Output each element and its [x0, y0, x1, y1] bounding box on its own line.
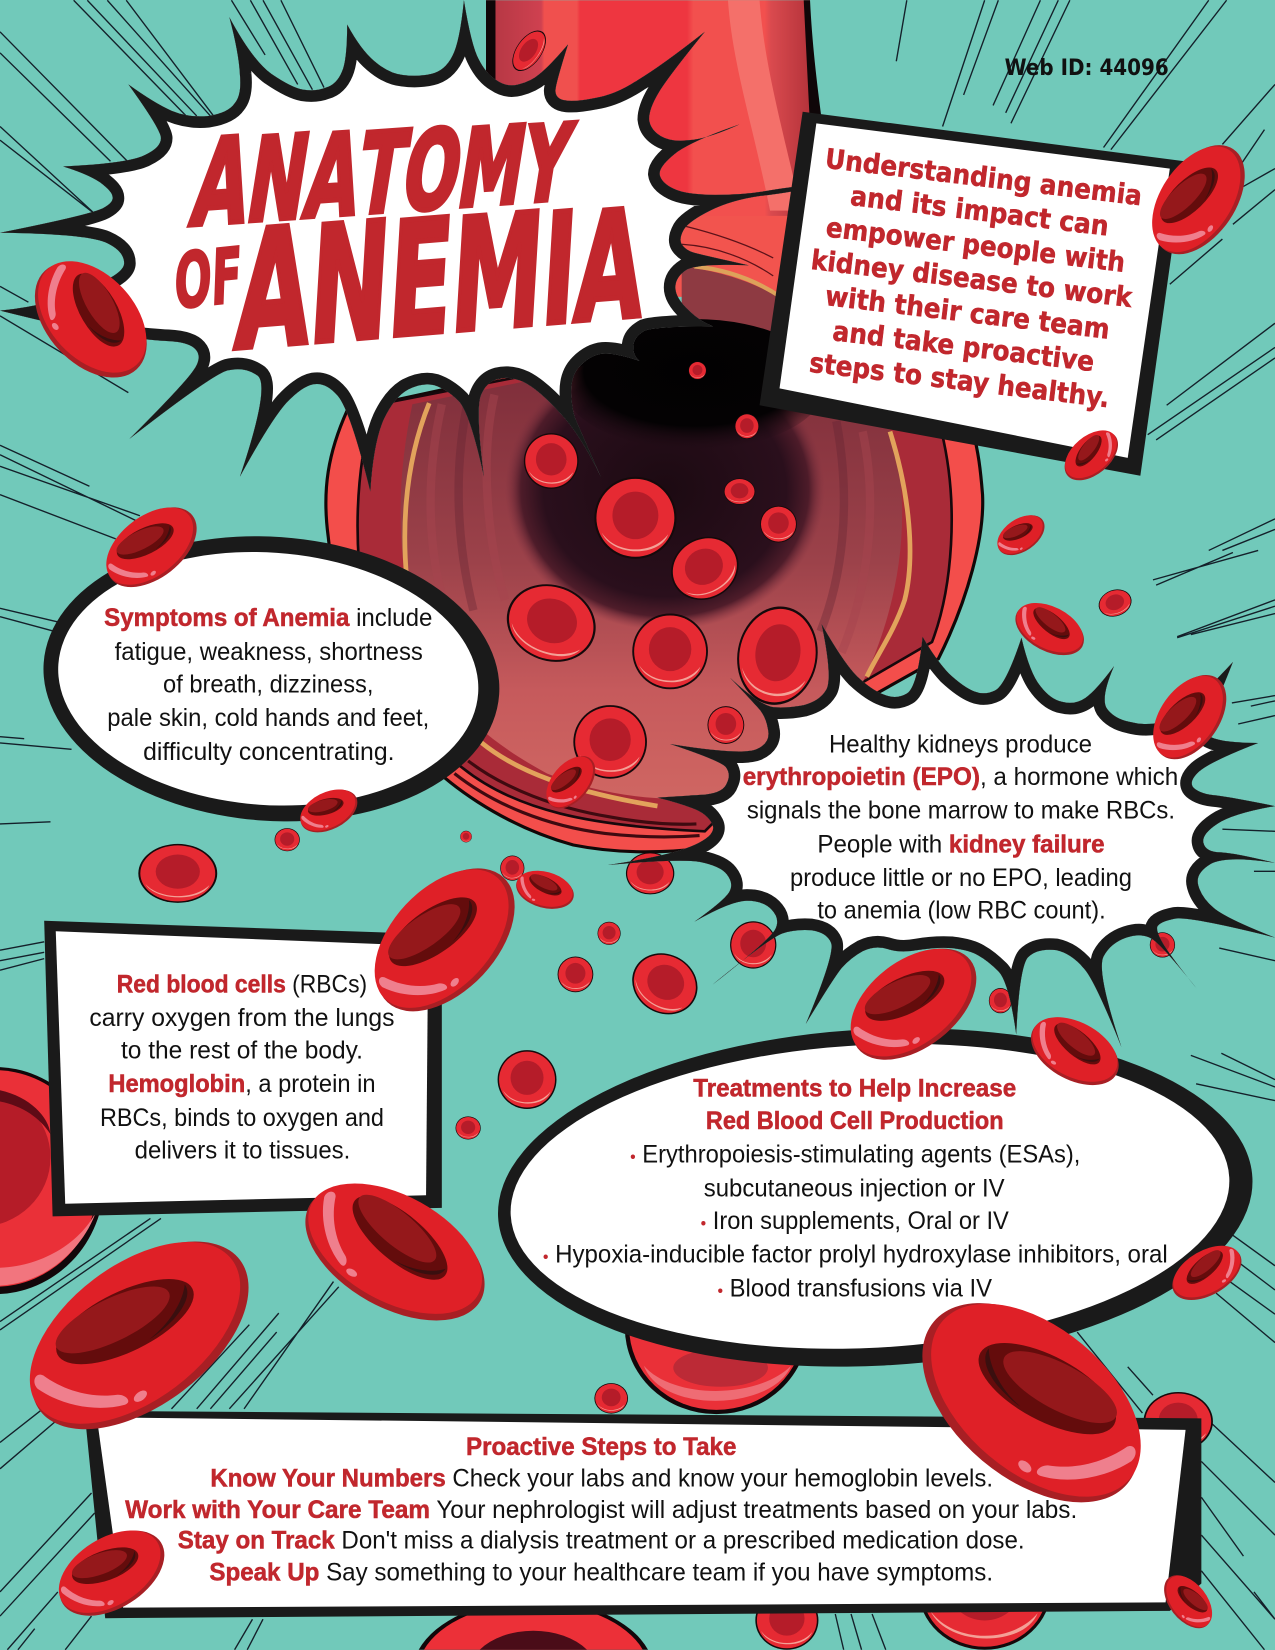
panel: symptoms bubble — [34, 521, 509, 836]
outlined floating cells — [138, 585, 1135, 1140]
red blood cell text: carry oxygen from the lungs — [89, 1004, 394, 1032]
treatments text: • Blood transfusions via IV — [717, 1274, 992, 1302]
symptoms text — [104, 604, 432, 766]
artery inner muscle — [401, 368, 902, 799]
red blood cell text: RBCs, binds to oxygen and — [100, 1104, 384, 1132]
intro text: empower people with — [824, 212, 1127, 279]
symptoms text: difficulty concentrating. — [143, 738, 394, 766]
treatments text — [543, 1074, 1168, 1302]
bottom cell left — [419, 1600, 648, 1650]
icon: cell near red blood cell box — [512, 865, 578, 915]
illustration: upper artery tube — [486, 0, 823, 368]
proactive steps text: Stay on Track Don't miss a dialysis treatment or a prescribed medication dose. — [178, 1527, 1025, 1555]
treatments text: subcutaneous injection or IV — [704, 1174, 1005, 1202]
panel: proactive steps box — [86, 1411, 1201, 1618]
icon: cell below red blood cell box — [283, 1156, 508, 1348]
title: ANATOMY OF ANEMIA — [173, 89, 649, 388]
red blood cell text: delivers it to tissues. — [135, 1136, 350, 1164]
intro text: and its impact can — [849, 181, 1110, 243]
treatments text: • Hypoxia-inducible factor prolyl hydroxylase inhibitors, oral — [543, 1241, 1168, 1269]
kidney starburst — [608, 624, 1275, 1047]
small cell behind proactive box right — [1144, 1392, 1213, 1451]
text: kidney EPO explanation: Healthy kidneys produce — [829, 730, 1092, 758]
title: ANATOMY OF ANEMIA: ANEMIA — [231, 165, 649, 388]
intro text: kidney disease to work — [809, 245, 1134, 314]
symptoms text: fatigue, weakness, shortness — [115, 638, 423, 666]
text: kidney EPO explanation: People with kidney failure — [817, 830, 1105, 858]
artery wall layers — [357, 363, 952, 831]
symptoms text: pale skin, cold hands and feet, — [107, 704, 429, 732]
small floating cell above proactive box — [594, 1383, 628, 1414]
illustration: artery cross-section — [326, 319, 983, 852]
text: kidney EPO explanation: produce little or no EPO, leading — [790, 864, 1132, 892]
icon: cell on treatments right — [1163, 1235, 1251, 1311]
red blood cell text: Hemoglobin, a protein in — [108, 1070, 376, 1098]
icon: cell above treatments — [1020, 1004, 1130, 1099]
web id label: Web ID: 44096 — [1005, 55, 1169, 81]
title starburst — [0, 0, 838, 492]
large cell behind the treatments bubble — [625, 1242, 808, 1414]
symptoms text: Symptoms of Anemia include — [104, 604, 432, 632]
text: kidney EPO explanation: to anemia (low RBC count). — [817, 897, 1106, 925]
title: ANATOMY OF ANEMIA: OF — [173, 230, 243, 327]
panel: treatments bubble — [489, 1010, 1261, 1385]
red blood cell text — [89, 970, 394, 1164]
icon: large cell on treatments and proactive — [885, 1262, 1177, 1542]
intro text: and take proactive — [831, 316, 1096, 378]
icon: cell above symptoms — [92, 490, 211, 603]
icon: large cell lower left — [0, 1202, 282, 1467]
artery outer wall — [326, 358, 983, 852]
icon: small cell right of artery — [990, 507, 1052, 563]
bottom cell middle — [755, 1591, 818, 1650]
icon: cell on proactive left — [44, 1512, 179, 1633]
icon: large cell on red blood cell box — [349, 841, 541, 1037]
text: kidney EPO explanation — [743, 730, 1178, 925]
intro text: with their care team — [824, 281, 1111, 346]
treatments text: Treatments to Help Increase — [693, 1074, 1016, 1102]
icon: cell at intro box corner — [1055, 421, 1127, 490]
intro text: steps to stay healthy. — [808, 348, 1111, 414]
proactive steps text: Work with Your Care Team Your nephrologist will adjust treatments based on your labs. — [125, 1496, 1077, 1524]
cells inside artery — [496, 25, 825, 779]
icon: small cell on artery — [537, 747, 605, 817]
free-floating small cells behind the kidney burst — [626, 852, 1175, 1013]
treatments text: • Erythropoiesis-stimulating agents (ESAs), — [630, 1141, 1080, 1169]
artery lumen — [505, 348, 825, 630]
proactive steps text: Know Your Numbers Check your labs and know your hemoglobin levels. — [210, 1465, 993, 1493]
treatments text: Red Blood Cell Production — [706, 1107, 1004, 1135]
intro text: Understanding anemia — [823, 144, 1144, 212]
proactive steps text: Proactive Steps to Take — [466, 1433, 736, 1461]
black vessel opening — [563, 319, 826, 449]
panel: intro box — [760, 112, 1185, 476]
red blood cell text: Red blood cells (RBCs) — [117, 970, 367, 998]
intro text — [797, 143, 1146, 416]
icon: cell on symptoms bubble — [293, 780, 364, 841]
muscle striations — [431, 395, 870, 652]
icon: cell on kidney burst bottom — [830, 925, 997, 1082]
large cell behind the red blood cell box — [0, 1067, 104, 1294]
panel: red blood cell box — [44, 921, 442, 1216]
text: kidney EPO explanation: erythropoietin (EPO), a hormone which — [743, 763, 1178, 791]
icon: cell right of artery — [1007, 593, 1093, 666]
title: ANATOMY OF ANEMIA: ANATOMY — [184, 89, 582, 254]
text: kidney EPO explanation: signals the bone marrow to make RBCs. — [747, 797, 1175, 825]
bottom cell right — [918, 1528, 1051, 1650]
red blood cell text: to the rest of the body. — [121, 1037, 363, 1065]
symptoms text: of breath, dizziness, — [163, 670, 373, 698]
lower artery bands — [454, 761, 700, 837]
icon: cell on proactive right — [1155, 1566, 1221, 1637]
icon: red blood cell on intro box — [1134, 128, 1264, 271]
icon: cell on kidney burst — [1139, 661, 1241, 772]
proactive steps text: Speak Up Say something to your healthcare team if you have symptoms. — [209, 1558, 993, 1586]
treatments text: • Iron supplements, Oral or IV — [701, 1207, 1009, 1235]
tan artery layer — [405, 403, 910, 806]
icon: red blood cell left of title — [13, 240, 170, 399]
proactive steps text — [125, 1433, 1077, 1586]
